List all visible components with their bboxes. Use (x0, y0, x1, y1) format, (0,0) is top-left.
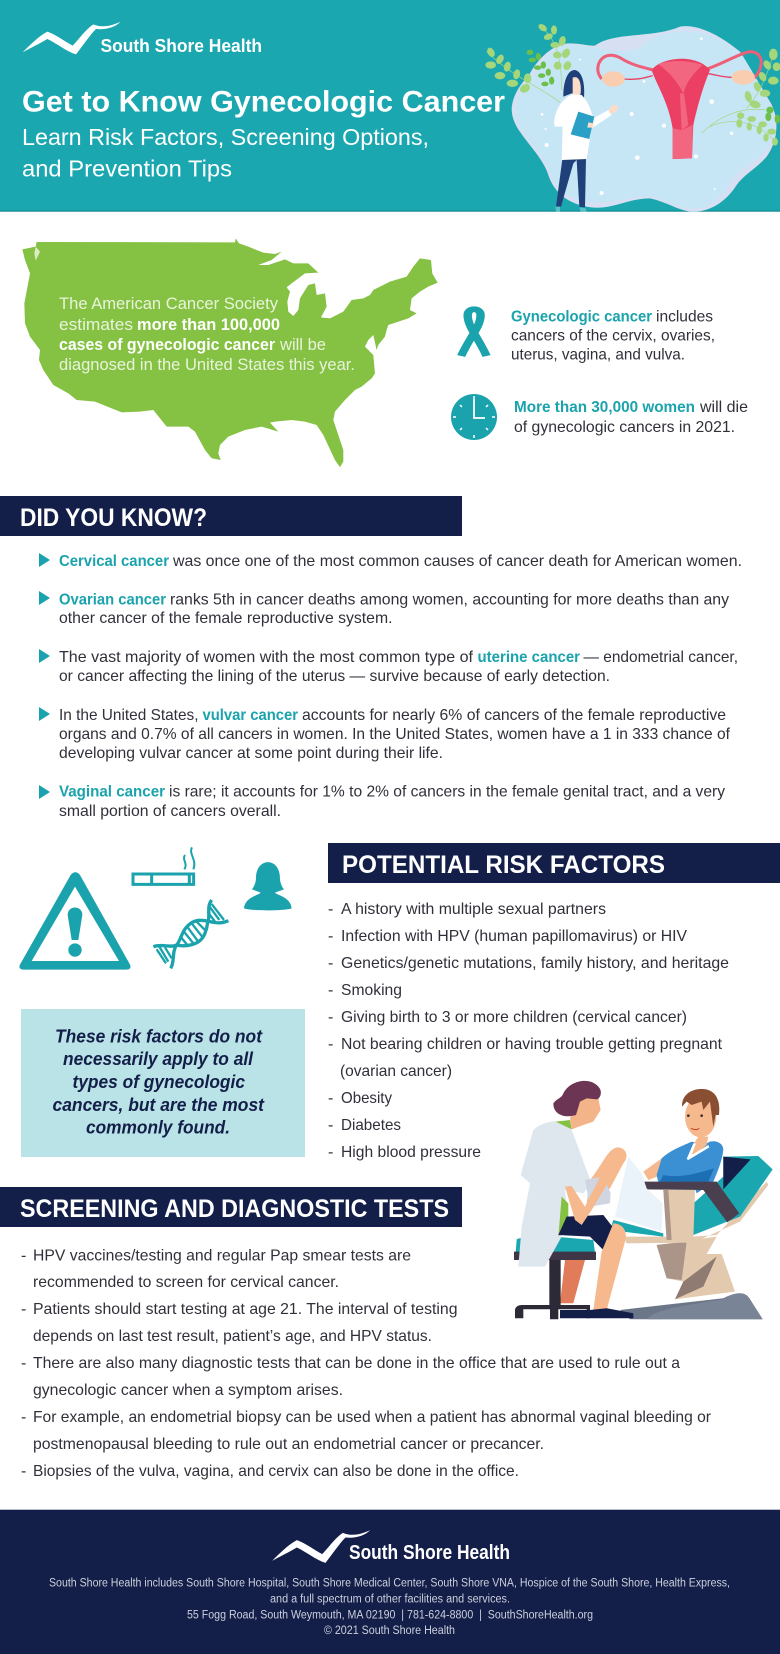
heading: POTENTIAL RISK FACTORS (342, 851, 665, 879)
map text: more than 100,000 (137, 316, 280, 334)
text (511, 308, 715, 364)
logo: South Shore Health (23, 22, 262, 56)
fact: ovarian cancer: other cancer of the female reproductive system. (59, 610, 392, 627)
callout: deaths in 2021 (451, 394, 748, 440)
screening list: - (21, 1463, 26, 1480)
callout: risk factor note: commonly found. (86, 1118, 230, 1138)
risk factor list: - (328, 901, 333, 918)
illustration: doctor and uterus on blob (485, 23, 780, 212)
icon: clock (451, 394, 497, 440)
risk factor list (328, 901, 729, 1161)
footer text: South Shore Health includes South Shore Hospital, South Shore Medical Center, South Shore VNA, Hospice of the South Shore, Health Express, (49, 1578, 730, 1590)
callout: risk factor note: types of gynecologic (72, 1072, 245, 1092)
screening list: recommended to screen for cervical cancer. (33, 1274, 339, 1291)
risk factor list: - (328, 1009, 333, 1026)
title: Get to Know Gynecologic Cancer (22, 86, 505, 118)
risk factor list: A history with multiple sexual partners (341, 901, 606, 918)
heading (328, 843, 780, 883)
fact: vulvar cancer (39, 707, 731, 762)
risk factor list: - (328, 1090, 333, 1107)
heading: DID YOU KNOW? (20, 504, 207, 532)
risk factor list: - (328, 928, 333, 945)
map text: diagnosed in the United States this year. (59, 356, 355, 374)
screening list (21, 1248, 712, 1480)
logo: South Shore Health (272, 1530, 510, 1564)
subtitle: and Prevention Tips (22, 156, 232, 182)
fact: ovarian cancer: Ovarian cancer (59, 592, 166, 608)
text: uterus, vagina, and vulva. (511, 346, 685, 364)
callout: gynecologic cancer definition (461, 308, 715, 364)
icon: cigarette (133, 847, 194, 884)
callout: risk factor note: cancers, but are the most (52, 1095, 265, 1115)
illustration: doctor examining patient (514, 1081, 773, 1319)
fact: ovarian cancer (39, 591, 729, 627)
text: of gynecologic cancers in 2021. (514, 419, 735, 436)
panel: header banner (0, 0, 780, 212)
risk factor list: - (328, 1144, 333, 1161)
callout: risk factor note: These risk factors do not (55, 1026, 263, 1046)
risk factor list: Infection with HPV (human papillomavirus) or HIV (341, 928, 687, 945)
fact: vaginal cancer: is rare; it accounts for 1% to 2% of cancers in the female genital tract, and a very (169, 784, 725, 800)
callout: risk factor note (21, 1009, 305, 1157)
risk factor list: Obesity (341, 1090, 392, 1107)
fact: cervical cancer: Cervical cancer (59, 553, 169, 570)
icon: woman silhouette (244, 862, 292, 910)
risk factor list: Giving birth to 3 or more children (cervical cancer) (341, 1009, 687, 1026)
logo: South Shore Health: South Shore Health (100, 35, 262, 56)
text: will die (699, 399, 748, 416)
panel: screening and diagnostic tests (0, 1187, 712, 1480)
map text: The American Cancer Society (59, 295, 279, 313)
fact: vaginal cancer: Vaginal cancer (59, 784, 165, 800)
fact: vulvar cancer: developing vulvar cancer at some point during their life. (59, 745, 443, 762)
fact: vulvar cancer: accounts for nearly 6% of cancers of the female reproductive (302, 707, 726, 724)
risk factor list: - (328, 1117, 333, 1134)
text (514, 399, 748, 436)
risk factor list: Genetics/genetic mutations, family history, and heritage (341, 955, 729, 972)
screening list: For example, an endometrial biopsy can be used when a patient has abnormal vaginal bleeding or (33, 1409, 712, 1426)
illustration: uterus (598, 52, 761, 159)
footer text (49, 1578, 730, 1637)
fact: vulvar cancer: In the United States, (59, 707, 198, 724)
map text: will be (279, 336, 326, 354)
panel: footer (0, 1509, 780, 1654)
risk factor list: - (328, 955, 333, 972)
risk factor list: Smoking (341, 982, 402, 999)
screening list: gynecologic cancer when a symptom arises. (33, 1382, 343, 1399)
screening list: postmenopausal bleeding to rule out an endometrial cancer or precancer. (33, 1436, 544, 1453)
map text: cases of gynecologic cancer (59, 336, 276, 354)
heading (0, 1187, 462, 1227)
footer text: © 2021 South Shore Health (324, 1625, 455, 1637)
subtitle (22, 124, 429, 182)
screening list: Biopsies of the vulva, vagina, and cervix can also be done in the office. (33, 1463, 519, 1480)
text: includes (656, 308, 713, 326)
icon: awareness ribbon (461, 309, 487, 356)
heading: SCREENING AND DIAGNOSTIC TESTS (20, 1195, 449, 1223)
panel: risk factor icons (19, 847, 292, 970)
text: cancers of the cervix, ovaries, (511, 328, 715, 344)
risk factor list: High blood pressure (341, 1144, 481, 1161)
icon: warning triangle (19, 872, 131, 970)
footer text: and a full spectrum of other facilities and services. (270, 1594, 510, 1606)
risk factor list: - (328, 1036, 333, 1053)
panel: US map callout (22, 238, 438, 467)
fact: uterine cancer (39, 649, 738, 685)
footer text: 55 Fogg Road, South Weymouth, MA 02190 | 781-624-8800 | SouthShoreHealth.org (187, 1610, 593, 1622)
logo: South Shore Health: South Shore Health (349, 1542, 510, 1564)
callout: risk factor note: necessarily apply to all (63, 1049, 254, 1069)
risk factor list: Not bearing children or having trouble getting pregnant (341, 1036, 723, 1053)
fact: vaginal cancer (39, 784, 725, 820)
subtitle: Learn Risk Factors, Screening Options, (22, 124, 429, 150)
risk factor list: (ovarian cancer) (340, 1063, 452, 1080)
risk factor list: Diabetes (341, 1117, 401, 1134)
heading (0, 496, 462, 536)
icon: leaves (485, 23, 780, 146)
risk factor list: - (328, 982, 333, 999)
fact: uterine cancer: — endometrial cancer, (584, 649, 738, 666)
screening list: depends on last test result, patient’s age, and HPV status. (33, 1328, 432, 1345)
screening list: - (21, 1301, 26, 1318)
screening list: - (21, 1409, 26, 1426)
fact: ovarian cancer: ranks 5th in cancer deaths among women, accounting for more deaths than any (170, 592, 729, 608)
fact: cervical cancer: was once one of the most common causes of cancer death for American women. (172, 553, 742, 570)
screening list: HPV vaccines/testing and regular Pap smear tests are (33, 1248, 411, 1264)
map of the United States (22, 238, 438, 467)
screening list: Patients should start testing at age 21. The interval of testing (33, 1301, 458, 1318)
map text: estimates (59, 316, 133, 334)
fact: uterine cancer: uterine cancer (478, 649, 580, 666)
icon: DNA helix (153, 900, 228, 968)
fact: vulvar cancer: organs and 0.7% of all cancers in women. In the United States, women have a 1 in 333 chance of (59, 726, 731, 743)
screening list: - (21, 1248, 26, 1264)
screening list: - (21, 1355, 26, 1372)
screening list: There are also many diagnostic tests that can be done in the office that are used to rule out a (33, 1355, 680, 1372)
fact: uterine cancer: or cancer affecting the lining of the uterus — survive because of early detection. (59, 668, 610, 685)
illustration: doctor figure (554, 70, 618, 212)
map text (59, 295, 355, 374)
fact: vaginal cancer: small portion of cancers overall. (59, 803, 281, 820)
panel: did you know (0, 496, 742, 820)
text: Gynecologic cancer (511, 308, 652, 326)
text: More than 30,000 women (514, 399, 695, 416)
panel: potential risk factors (328, 843, 780, 1161)
fact: uterine cancer: The vast majority of women with the most common type of (59, 649, 474, 666)
fact: vulvar cancer: vulvar cancer (202, 707, 298, 724)
